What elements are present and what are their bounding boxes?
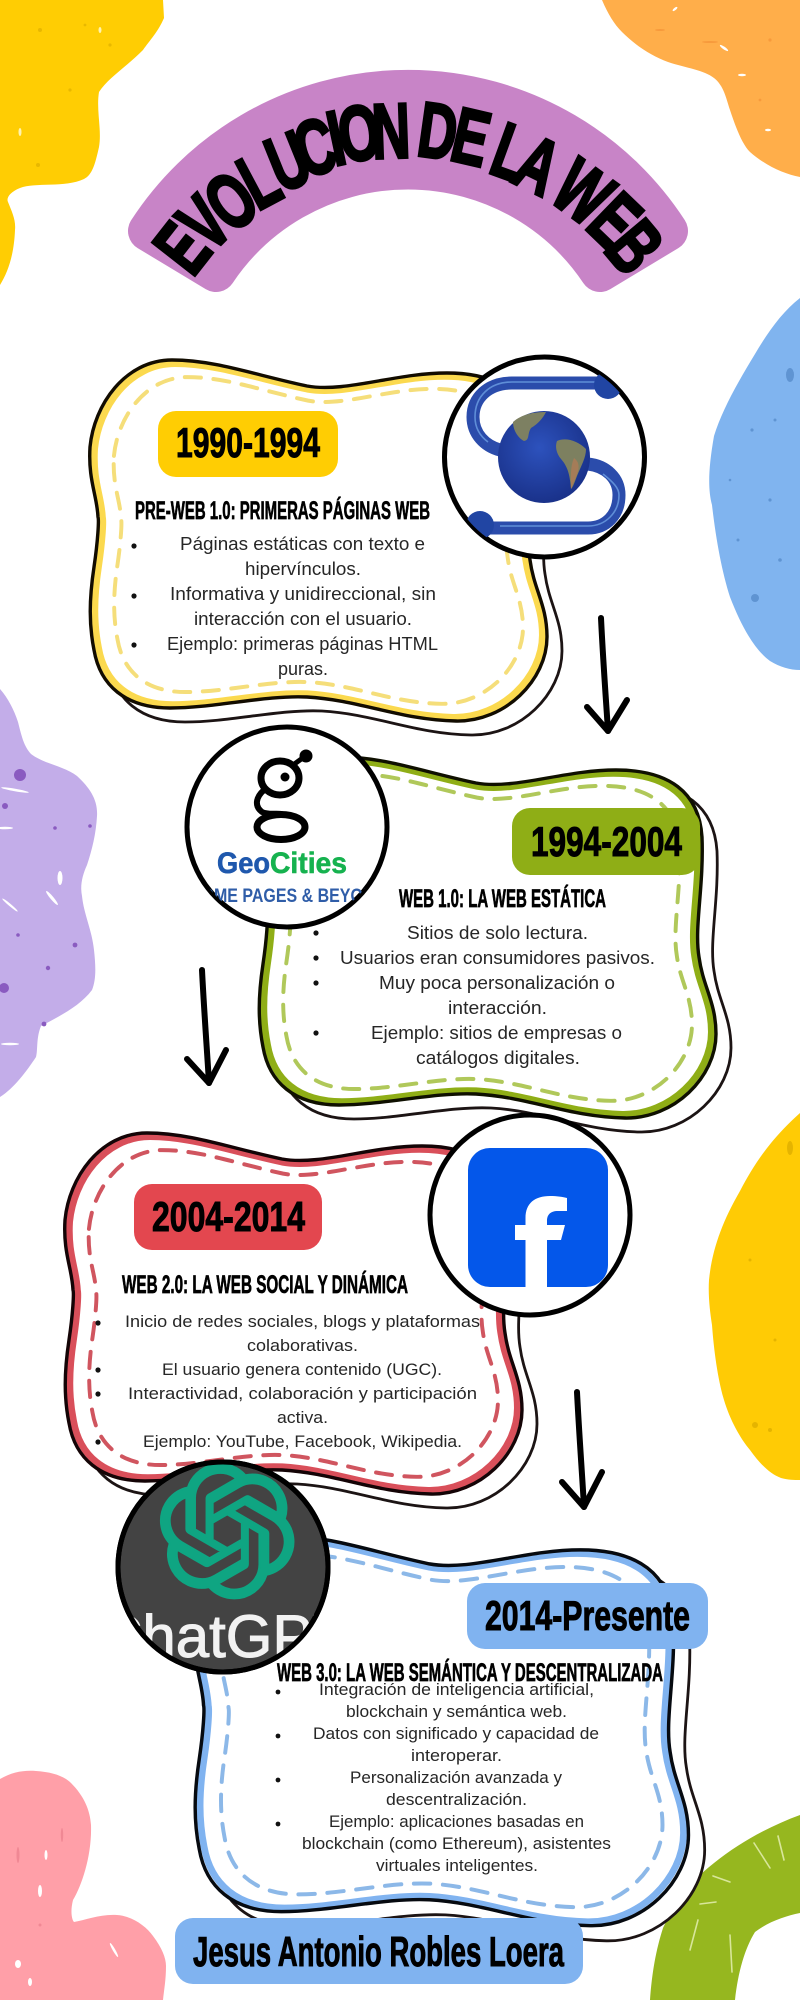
card 2 bullet list: Sitios de solo lectura. xyxy=(407,923,588,943)
author name pill xyxy=(175,1918,583,1984)
card 4 bullet list: descentralización. xyxy=(386,1790,527,1809)
card 2 bullet list: interacción. xyxy=(448,998,547,1018)
blob: yellow right xyxy=(709,1113,800,1480)
title: O xyxy=(188,153,274,249)
blob: pink bottom left xyxy=(0,1771,166,2000)
arrow 1 xyxy=(587,618,627,731)
icon: GeoCities logo circle: Cities xyxy=(270,847,347,880)
card 4 bullet list: blockchain (como Ethereum), asistentes xyxy=(302,1834,611,1853)
icon: ChatGPT logo circle xyxy=(116,1460,330,1674)
card 4 bullet list: virtuales inteligentes. xyxy=(376,1856,538,1875)
card 4 bullet list: interoperar. xyxy=(411,1746,502,1765)
card 3 bullet list: Ejemplo: YouTube, Facebook, Wikipedia. xyxy=(143,1432,462,1451)
card 3 bullet list: Interactividad, colaboración y participación xyxy=(128,1384,477,1403)
card 3 year pill xyxy=(134,1184,322,1250)
title: W xyxy=(537,142,629,242)
icon: GeoCities logo circle: Geo xyxy=(217,847,270,880)
card 2 year pill xyxy=(512,808,700,875)
card 3 panel: red xyxy=(65,1133,537,1508)
card 2 bullet list xyxy=(313,923,655,1068)
card 3 bullet list: Inicio de redes sociales, blogs y plataformas xyxy=(125,1312,480,1331)
icon: GeoCities logo circle: HOME PAGES & BEYOND xyxy=(190,886,386,907)
card 1 bullet list: Ejemplo: primeras páginas HTML xyxy=(167,634,438,654)
card 2 bullet list: Usuarios eran consumidores pasivos. xyxy=(340,948,655,968)
card 1 bullet list: Páginas estáticas con texto e xyxy=(180,534,425,554)
card 4 year pill: 2014-Presente xyxy=(485,1592,690,1639)
card 2 bullet list: Muy poca personalización o xyxy=(379,973,615,993)
title: D xyxy=(413,85,463,177)
title: C xyxy=(284,99,346,195)
card 4 bullet list: Datos con significado y capacidad de xyxy=(313,1724,599,1743)
title: L xyxy=(481,105,541,199)
blob: orange top right xyxy=(602,0,800,177)
title xyxy=(136,85,681,290)
card 1 year pill xyxy=(158,411,338,477)
card 4 bullet list xyxy=(276,1680,611,1875)
card 3 bullet list: activa. xyxy=(277,1408,328,1427)
card 3 bullet list: El usuario genera contenido (UGC). xyxy=(162,1360,442,1379)
title: B xyxy=(589,204,681,290)
title: V xyxy=(160,179,248,267)
title: E xyxy=(572,176,658,264)
card 3 bullet list: colaborativas. xyxy=(247,1336,358,1355)
card 1 bullet list xyxy=(131,534,438,679)
card 4 bullet list: Personalización avanzada y xyxy=(350,1768,562,1787)
title: L xyxy=(224,134,294,226)
title: U xyxy=(254,113,322,209)
card 2 bullet list: Ejemplo: sitios de empresas o xyxy=(371,1023,622,1043)
card 3 bullet list xyxy=(95,1312,480,1451)
title: I xyxy=(320,93,352,183)
card 3 year pill: 2004-2014 xyxy=(152,1193,305,1240)
title: O xyxy=(332,87,386,179)
card 4 bullet list: blockchain y semántica web. xyxy=(346,1702,567,1721)
blob: green arch bottom right xyxy=(650,1815,800,2000)
card 4 year pill xyxy=(467,1583,708,1649)
card 2 bullet list: catálogos digitales. xyxy=(416,1048,580,1068)
card 4 bullet list: Integración de inteligencia artificial, xyxy=(319,1680,594,1699)
blob: purple left xyxy=(0,689,97,1097)
card 4 panel: blue xyxy=(195,1536,705,1941)
author name pill: Jesus Antonio Robles Loera xyxy=(193,1928,564,1975)
card 1 year pill: 1990-1994 xyxy=(176,419,320,466)
card 1 bullet list: hipervínculos. xyxy=(245,559,361,579)
icon: GeoCities logo circle xyxy=(187,727,387,927)
card 1 bullet list: puras. xyxy=(278,659,328,679)
title: N xyxy=(370,86,412,176)
card 1 bullet list: interacción con el usuario. xyxy=(194,609,412,629)
card 2 year pill: 1994-2004 xyxy=(531,818,682,865)
title: E xyxy=(444,90,498,184)
title: A xyxy=(501,117,575,213)
arrow 3 xyxy=(562,1392,602,1507)
card 1 panel: yellow xyxy=(90,360,562,735)
icon: ChatGPT logo circle: ChatGPT xyxy=(99,1603,349,1670)
card 1 bullet list: Informativa y unidireccional, sin xyxy=(170,584,436,604)
title arch band xyxy=(148,90,668,272)
blob: yellow top left xyxy=(0,0,164,285)
card 3 heading: WEB 2.0: LA WEB SOCIAL Y DINÁMICA xyxy=(122,1270,408,1299)
icon: Facebook logo circle xyxy=(430,1115,630,1315)
card 1 heading: PRE-WEB 1.0: PRIMERAS PÁGINAS WEB xyxy=(135,496,430,525)
blob: blue right xyxy=(709,298,800,670)
title: E xyxy=(136,207,228,289)
arrow 2 xyxy=(187,970,226,1083)
icon: globe logo circle xyxy=(444,357,644,557)
card 2 panel: green xyxy=(259,757,731,1132)
card 2 heading: WEB 1.0: LA WEB ESTÁTICA xyxy=(399,884,606,913)
card 4 bullet list: Ejemplo: aplicaciones basadas en xyxy=(329,1812,584,1831)
